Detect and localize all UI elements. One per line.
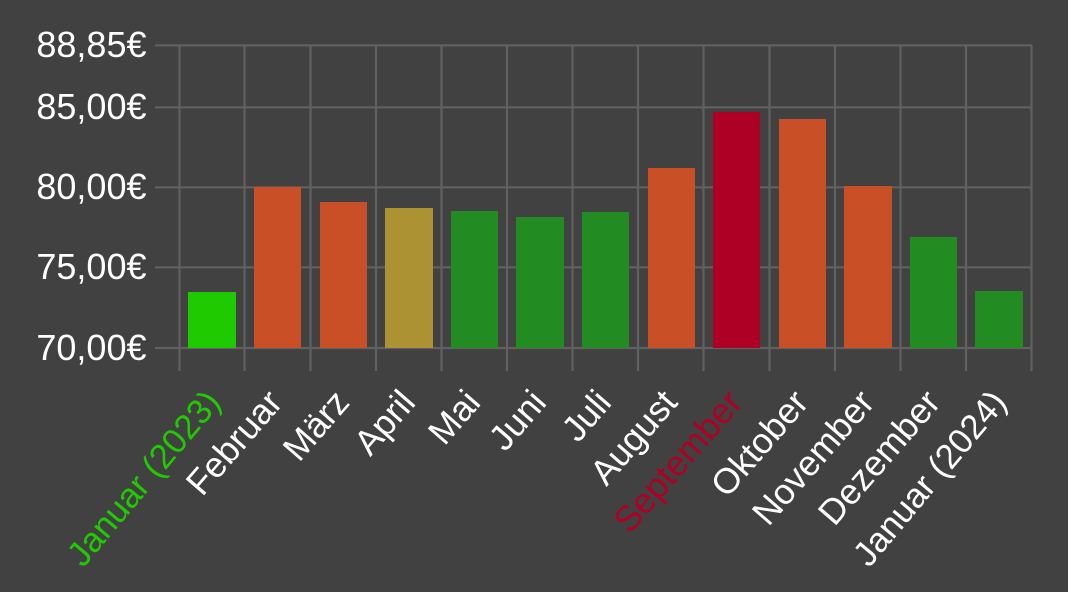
x axis labels: April: [346, 383, 423, 462]
y axis labels: 70,00€: [36, 327, 146, 368]
x axis labels: Februar: [178, 382, 290, 503]
x axis labels: August: [582, 382, 685, 492]
y axis labels: [36, 24, 146, 368]
x axis labels: Januar (2023): [60, 384, 228, 574]
x axis labels: Juli: [554, 383, 619, 449]
x axis labels: Dezember: [810, 382, 948, 533]
x axis labels: März: [275, 383, 357, 468]
x axis labels: Januar (2024): [846, 384, 1014, 574]
x axis labels: Juni: [481, 383, 554, 458]
x axis labels: September: [606, 382, 750, 540]
bars: [188, 112, 1023, 348]
y axis labels: 80,00€: [36, 166, 146, 207]
y axis labels: 85,00€: [36, 86, 146, 127]
y axis labels: 75,00€: [36, 246, 146, 287]
x axis labels: November: [744, 382, 882, 533]
x axis labels: [60, 382, 1014, 574]
x axis labels: Oktober: [703, 382, 816, 504]
x axis labels: Mai: [420, 383, 488, 452]
y axis labels: 88,85€: [36, 24, 146, 65]
